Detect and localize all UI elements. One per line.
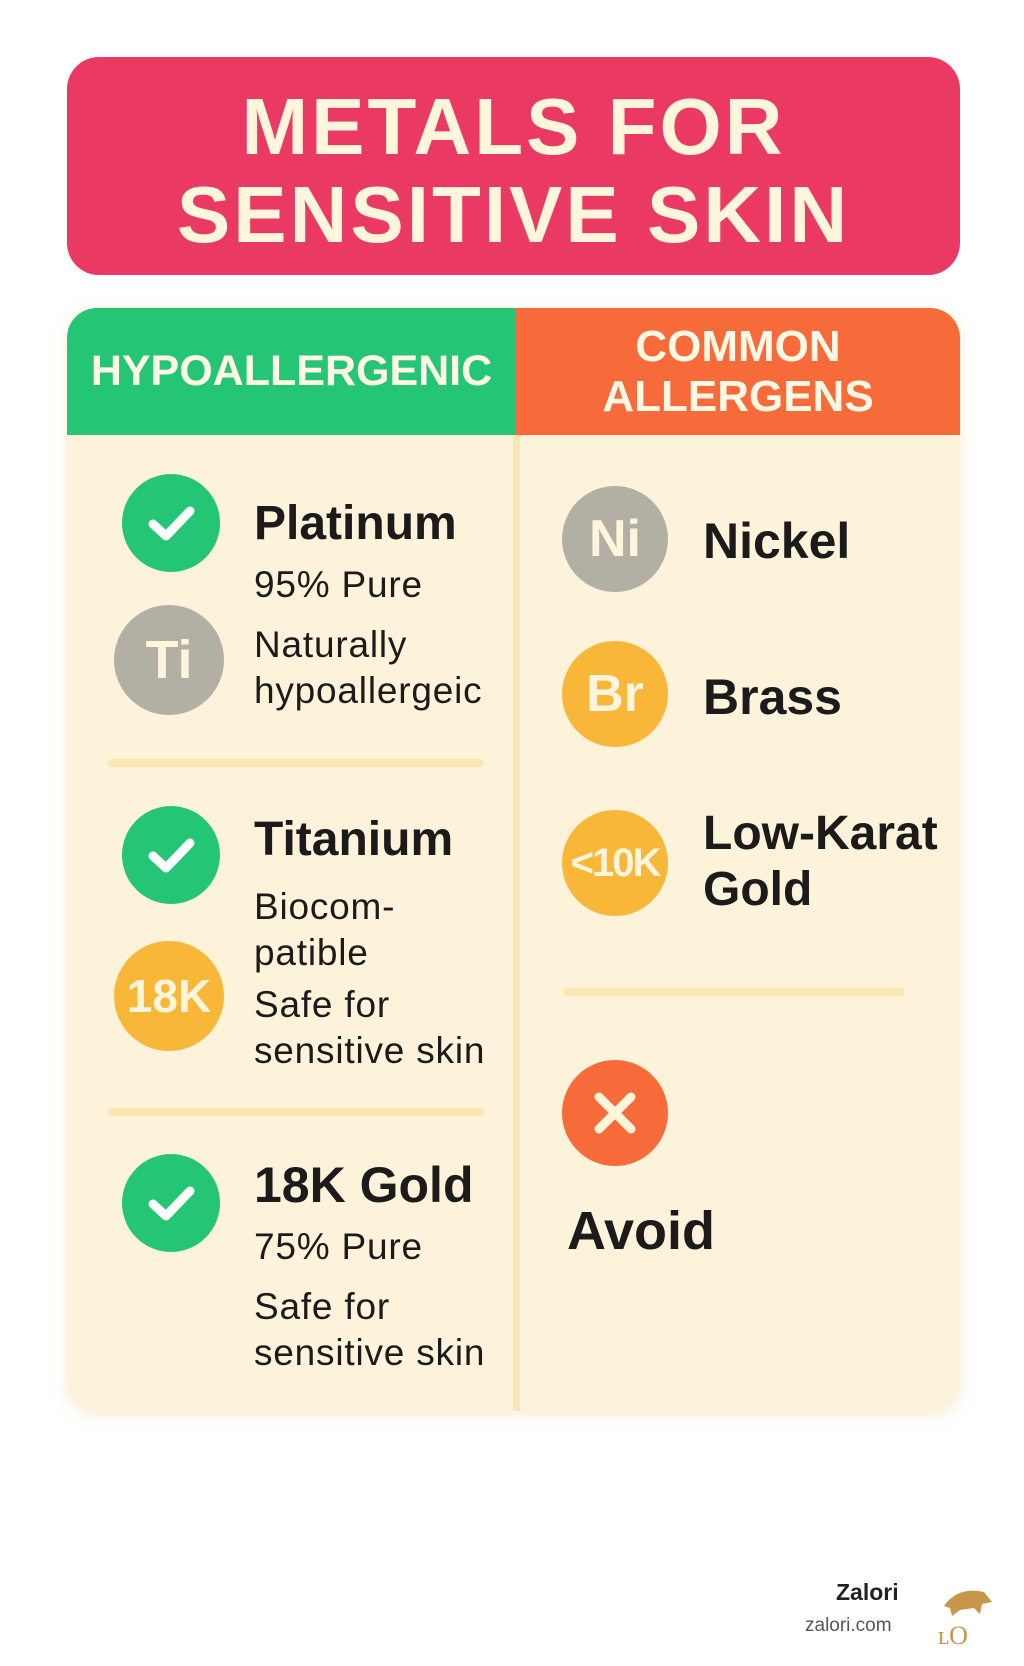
panel: hypoallergenic items: patible [254, 932, 369, 973]
header: hypoallergenic [67, 308, 516, 435]
icon: <10K [562, 810, 668, 916]
title text: SENSITIVE SKIN [177, 170, 850, 259]
icon: check gold [122, 1154, 220, 1252]
icon: x avoid [562, 1060, 668, 1166]
panel: hypoallergenic items: Safe for [254, 984, 390, 1025]
header: common allergens [516, 308, 960, 435]
text: titanium: Titanium [254, 813, 453, 866]
panel: hypoallergenic items: 75% Pure [254, 1226, 423, 1267]
panel: hypoallergenic items: hypoallergeic [254, 670, 482, 711]
icon: check platinum [122, 474, 220, 572]
text: 18K gold: 18K Gold [254, 1157, 473, 1213]
panel: hypoallergenic items: 95% Pure [254, 564, 423, 605]
panel: hypoallergenic items: sensitive skin [254, 1030, 485, 1071]
text: avoid: Avoid [567, 1201, 715, 1261]
panel: hypoallergenic items: Safe for [254, 1286, 390, 1327]
panel: allergens items [562, 486, 938, 1261]
text: low-karat gold: Gold [703, 863, 812, 916]
text: nickel: Nickel [703, 513, 850, 569]
icon: Ti: Ti [145, 630, 192, 690]
icon: check titanium [122, 806, 220, 904]
icon: 18K: 18K [127, 970, 211, 1022]
text: low-karat gold [703, 807, 938, 916]
icon: <10K: <10K [571, 840, 659, 884]
panel: hypoallergenic items: sensitive skin [254, 1332, 485, 1373]
footer brand: Zalori [836, 1579, 899, 1605]
header: hypoallergenic: HYPOALLERGENIC [91, 347, 492, 395]
panel: hypoallergenic items: Biocom- [254, 886, 395, 927]
footer brand: zalori.com [805, 1615, 892, 1636]
icon: 18K [114, 941, 224, 1051]
icon: logo [938, 1590, 992, 1648]
footer brand [805, 1579, 992, 1648]
title banner [67, 57, 960, 275]
text: low-karat gold: Low-Karat [703, 807, 938, 860]
icon: Br [562, 641, 668, 747]
panel: hypoallergenic items [108, 474, 485, 1373]
text: platinum: Platinum [254, 497, 457, 550]
header: common allergens: ALLERGENS [602, 372, 874, 420]
icon: Br: Br [586, 665, 644, 723]
header: common allergens: COMMON [635, 322, 841, 370]
icon: Ni: Ni [589, 510, 641, 568]
icon: Ti [114, 605, 224, 715]
panel: hypoallergenic items: Naturally [254, 624, 407, 665]
title text [177, 82, 850, 259]
text: brass: Brass [703, 669, 842, 725]
icon: Ni [562, 486, 668, 592]
title text: METALS FOR [241, 82, 786, 171]
comparison table [67, 308, 960, 1411]
